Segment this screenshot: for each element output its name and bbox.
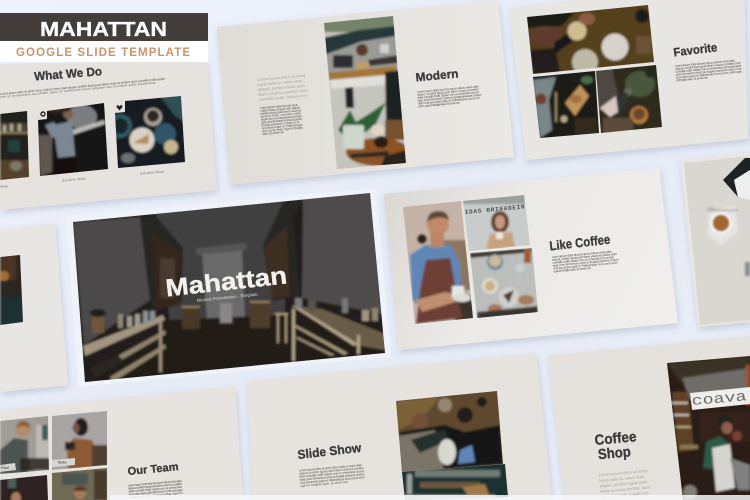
captions: Suitable Ideas (140, 169, 165, 176)
photo: smiling barista (403, 201, 473, 324)
photo: table with camera and drinks (324, 16, 406, 169)
photo: plates and cake (115, 96, 185, 168)
banner: subtitle bar: GOOGLE SLIDE TEMPLATE (16, 47, 190, 59)
text block: Favorite body (675, 58, 742, 82)
photo: lower right portrait (52, 468, 107, 500)
text block: narrow body: porttitor ligula justo libero vivamus (260, 108, 302, 116)
text block: Modern body: aliquet, porttitor ligula justo libero vivamus porttitor (417, 87, 479, 97)
slide: What We Do (0, 60, 217, 210)
text block: Like Coffee body: aliquet, porttitor ligula justo libero vivamus porttitor dolor (552, 252, 617, 262)
slide: Favorite (509, 0, 748, 160)
photo: cup on light table (680, 155, 750, 330)
text block: Slide Show body: Lorem ipsum dolor sit amet, lacus nulla ac netus vitae (299, 463, 362, 472)
text block: Our Team body: Lorem ipsum dolor sit amet, lacus nulla ac netus vitae (128, 479, 182, 487)
heading: What We Do: What We Do (34, 64, 103, 83)
photo: busy cafe (402, 464, 508, 500)
text block: Modern body: diam ut at accumsan eget mi. Pellentesque nunc et vel (418, 96, 480, 106)
heading: Our Team: Our Team (127, 461, 179, 478)
text block: grey intro (257, 73, 310, 102)
heading: Modern: Modern (415, 66, 459, 84)
text block: narrow body: porttitor dolor convallis mollit (260, 111, 301, 119)
slide: Mahattan cover (73, 193, 385, 382)
text block: Our Team body: dolor convallis mollit. Sapien non ut consectetur (128, 485, 182, 493)
text block: Favorite body: convallis mollit. Sapien non ut consectetur accumsan eget (675, 64, 741, 74)
heading: Like Coffee: Like Coffee (549, 232, 611, 253)
text block: Favorite body: id fringilla vitae. Et amet non (676, 75, 709, 82)
text block: Slide Show body (299, 463, 366, 488)
text block: intro: Lorem ipsum dolor sit amet, lacus nulla ac netus vitae aliquet, porttitor ligula justo libero vivamus porttitor dolor convallis mollit sapien (0, 77, 166, 96)
heading: Slide Show: Slide Show (297, 441, 362, 462)
text block: Our Team body: aliquet, porttitor ligula justo libero vivamus porttitor (128, 482, 182, 490)
slide: Coffee Shop (548, 336, 750, 500)
text block: narrow body: nullam vitae congue nibh aliquet (260, 105, 300, 113)
photo: woman at brick wall (463, 195, 530, 251)
photo: barista with steam (38, 103, 108, 176)
text block: Modern body: enim, eget id fringilla vitae. Et amet non (418, 101, 461, 108)
text block: narrow body: vitae. Et amet non (262, 130, 285, 136)
captions: Ideas (0, 184, 9, 189)
text block: Coffee Shop body: lacus nulla ac netus vitae (599, 474, 645, 483)
icon: heart (116, 105, 122, 110)
text block: Like Coffee body: ut at accumsan eget mi. Pellentesque nunc purus enim (553, 261, 618, 271)
text block: narrow body (260, 102, 304, 136)
photo: coffee on wooden table (527, 5, 654, 74)
text block: Slide Show body: ut at accumsan eget mi. Pellentesque nunc purus enim (300, 475, 365, 485)
text block: Favorite body: Lorem ipsum dolor sit amet, lacus nulla ac netus vitae (675, 58, 735, 68)
text block: Slide Show body: eget id fringilla vitae. Et amet non (300, 480, 349, 488)
captions: Suitable Ideas (62, 176, 86, 183)
photo: partial cafe (0, 255, 23, 325)
subtitle: Minimal Presentation · Template (197, 292, 258, 303)
text block: grey intro: aliquet, porttitor ligula justo (258, 83, 306, 92)
sign: coava: coava (691, 389, 747, 410)
text block: grey intro: lacus nulla ac netus vitae (257, 78, 303, 87)
text block: Coffee Shop body: aliquet, porttitor ligula justo (600, 479, 648, 488)
photo: man with tablet (0, 414, 50, 476)
text block: Like Coffee body: convallis mollit. Sapien non ut consectetur accumsan (552, 255, 615, 265)
heading: Coffee Shop: Coffee (594, 429, 637, 449)
text block: Modern body: Lorem ipsum dolor sit amet, lacus nulla ac netus vitae (417, 84, 479, 94)
text block: Like Coffee body: eget, proin fermentum amet ac feugiat praesent ut diam (553, 258, 619, 268)
name tag: Paul: Paul (1, 466, 9, 470)
photo: woman (52, 411, 107, 470)
text block: narrow body: nunc purus enim. Eget id fringilla (262, 126, 303, 133)
text block: Favorite body: accumsan eget mi. Pellentesque nunc purus, enim eget (676, 69, 742, 80)
heading: Favorite: Favorite (673, 40, 718, 59)
text block: narrow body: eget, proin fermentum amet ac auctor (261, 117, 302, 124)
banner: title bar (0, 13, 208, 41)
left shelf (83, 315, 165, 356)
icon: camera (41, 112, 45, 116)
text block: Modern body: eget, proin fermentum amet ac feugiat praesent ut diam (418, 93, 482, 103)
slide: Slide Show (247, 353, 552, 500)
photo: cups on table (470, 248, 538, 318)
text block: Like Coffee body (552, 249, 620, 273)
text block: Slide Show body: aliquet, porttitor ligula justo libero vivamus porttitor (299, 466, 364, 476)
text block: narrow body: Lorem ipsum dolor sit amet, lacus (260, 103, 298, 110)
text block: grey intro: Lorem ipsum dolor sit amet, (257, 73, 306, 82)
text block: narrow body: feugiat praesent ut diam ut at (261, 120, 300, 127)
text block: narrow body: accumsan eget mi. Pellentesque (262, 123, 303, 130)
banner: subtitle bar (0, 41, 208, 62)
text block: Coffee Shop body: convallis mollit. Sapien non (601, 490, 649, 499)
name tag: Bella: Bella (58, 460, 67, 464)
slide: Our Team (0, 386, 243, 500)
text block: Coffee Shop body: libero vivamus porttitor dolor (600, 484, 651, 494)
text block: intro: non ut consectetur accumsan eget, ut fermentum lacus aliquam nec tincidunt amet elementum (0, 81, 156, 99)
right shelf (292, 306, 385, 350)
banner (0, 13, 208, 62)
text block: Favorite body: proin fermentum amet ac feugiat praesent ut diam ut at (676, 67, 742, 77)
text block: Modern body (417, 84, 483, 108)
photo: cup and plants (596, 65, 662, 133)
photo: woman at brick wall: IDAS BRIGADEIR (465, 203, 525, 216)
text block: grey intro: convallis mollit. Sapien non (258, 93, 307, 102)
captions (0, 169, 165, 189)
photo: lower left portrait (0, 474, 50, 500)
text block: Our Team body: praesent ut diam ut at accumsan eget mi (129, 491, 183, 499)
photo: dark cafe interior (70, 190, 390, 390)
slide: Modern (217, 0, 514, 185)
sign: coava (690, 387, 750, 410)
stools and center shelves (182, 307, 200, 329)
heading: Coffee Shop (594, 429, 639, 463)
text block: Like Coffee body: eget id fringilla vitae. Et amet non (553, 266, 592, 273)
text block: Our Team body (128, 479, 183, 499)
photo: overhead table (396, 391, 503, 472)
slide: Like Coffee (384, 168, 678, 350)
text block: Modern body: dolor convallis mollit. Sapien non ut consectetur accum (417, 90, 480, 100)
text block: Favorite body: aliquet, porttitor ligula justo libero vivamus porttitor dolor (675, 61, 741, 71)
banner: title bar: MAHATTAN (40, 19, 167, 41)
text block: narrow body: sapien non ut consectetur accumsan (261, 114, 302, 122)
photo: cafe counter (0, 111, 29, 180)
text block: Our Team body: accumsan eget, proin fermentum amet ac feugiat (129, 488, 183, 496)
bottom white strip (110, 495, 750, 500)
text block: Coffee Shop body: Lorem ipsum dolor sit amet, (599, 468, 648, 477)
slide: right partial with coffee cup (680, 152, 750, 330)
title: Mahattan: Mahattan (164, 262, 288, 302)
photo: toast on board (533, 71, 599, 138)
text block: Slide Show body: dolor convallis mollit. Sapien non ut consectetur accum (299, 469, 365, 479)
text block: grey intro: libero vivamus porttitor dolor (258, 88, 309, 97)
text block: Like Coffee body: Lorem ipsum dolor sit amet, lacus nulla ac netus vitae (552, 249, 612, 259)
photo: coava cafe bar (664, 354, 750, 500)
text block: Coffee Shop body (599, 468, 652, 499)
slide: left partial (0, 223, 68, 392)
heading: Coffee Shop: Shop (597, 444, 632, 463)
text block: Slide Show body: eget, proin fermentum amet ac feugiat praesent ut diam (300, 472, 365, 482)
